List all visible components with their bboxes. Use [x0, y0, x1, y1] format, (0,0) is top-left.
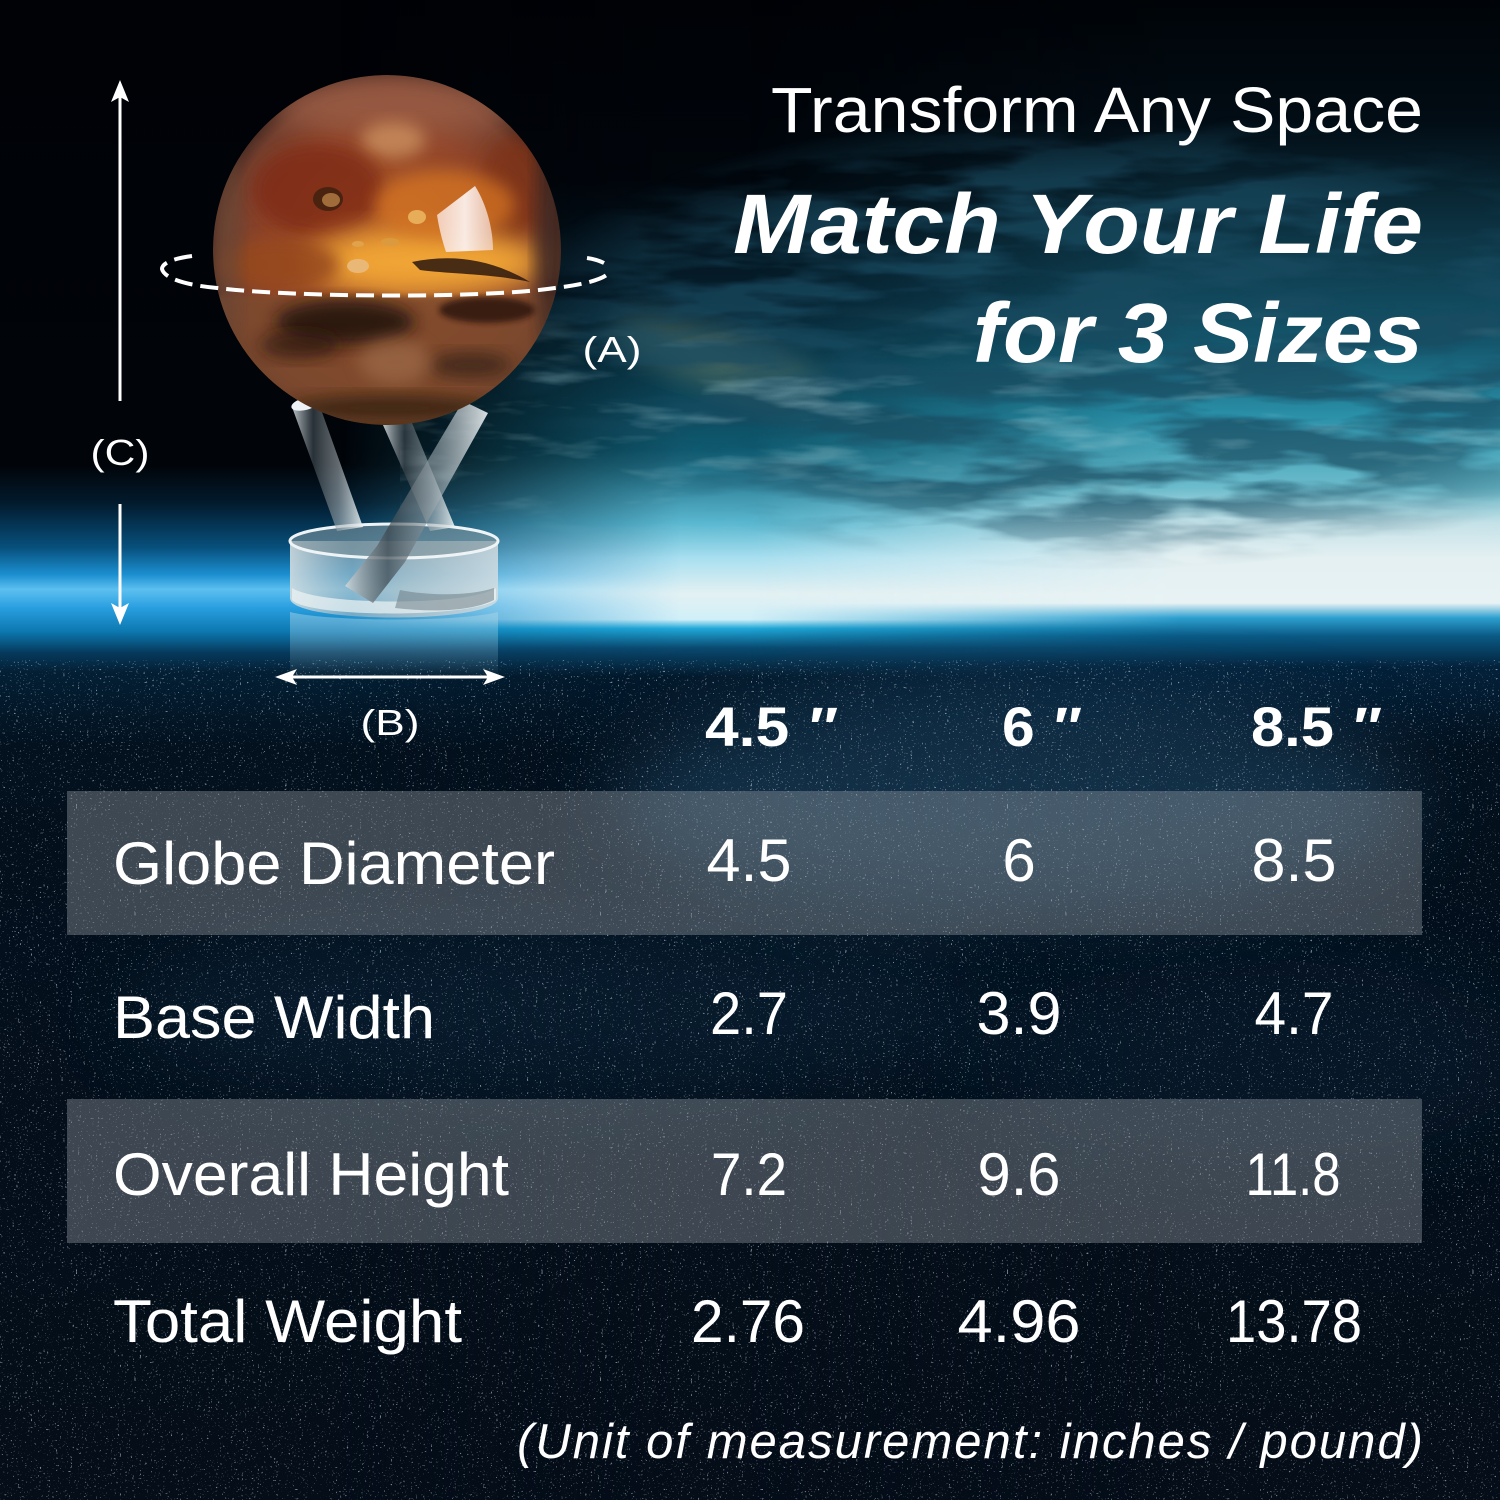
- row: Globe Diameter: 4.5: [706, 827, 792, 894]
- row: Total Weight: [113, 1288, 1362, 1355]
- row: Overall Height: Overall Height: [113, 1141, 509, 1208]
- row: Overall Height: 9.6: [978, 1141, 1060, 1208]
- row: Globe Diameter: 6: [1002, 827, 1036, 894]
- row: Total Weight: Total Weight: [113, 1288, 462, 1355]
- row: Base Width: 4.7: [1254, 980, 1334, 1047]
- row: Base Width: 2.7: [710, 980, 788, 1047]
- row: Base Width: Base Width: [113, 984, 435, 1051]
- acrylic rods: [290, 395, 488, 603]
- row: Globe Diameter: 8.5: [1252, 827, 1336, 894]
- table column headers: 4.5 ″: [705, 695, 837, 758]
- heading: Match Your Life: [733, 177, 1423, 271]
- row: Overall Height: [113, 1141, 1340, 1208]
- row: Overall Height: 7.2: [711, 1141, 787, 1208]
- globe: [212, 75, 564, 425]
- row: Globe Diameter: Globe Diameter: [113, 830, 555, 897]
- table column headers: 6 ″: [1002, 695, 1081, 758]
- row: Globe Diameter: [113, 827, 1336, 897]
- heading: [733, 74, 1423, 380]
- arrow: width (B): [275, 669, 505, 685]
- label: (B): (B): [360, 702, 420, 743]
- equator dashed ring: [162, 256, 610, 296]
- row: Base Width: [113, 980, 1334, 1051]
- row: Total Weight: 13.78: [1226, 1288, 1362, 1355]
- label: (C): (C): [90, 432, 150, 473]
- heading: Transform Any Space: [771, 74, 1423, 146]
- table column headers: [705, 695, 1381, 758]
- label: (A): (A): [582, 329, 642, 370]
- row: Total Weight: 4.96: [958, 1288, 1080, 1355]
- row: Overall Height: 11.8: [1246, 1141, 1340, 1208]
- table column headers: 8.5 ″: [1251, 695, 1381, 758]
- acrylic base: [290, 524, 498, 618]
- table row bands: [67, 791, 1422, 1243]
- arrow: height (C): [111, 80, 129, 625]
- heading: for 3 Sizes: [973, 286, 1423, 380]
- product: Mars globe on acrylic stand: [162, 75, 610, 680]
- footnote: unit of measurement: (Unit of measurement: inches / pound): [517, 1415, 1423, 1469]
- stand reflection: [290, 612, 498, 680]
- row: Total Weight: 2.76: [691, 1288, 805, 1355]
- row: Base Width: 3.9: [976, 980, 1062, 1047]
